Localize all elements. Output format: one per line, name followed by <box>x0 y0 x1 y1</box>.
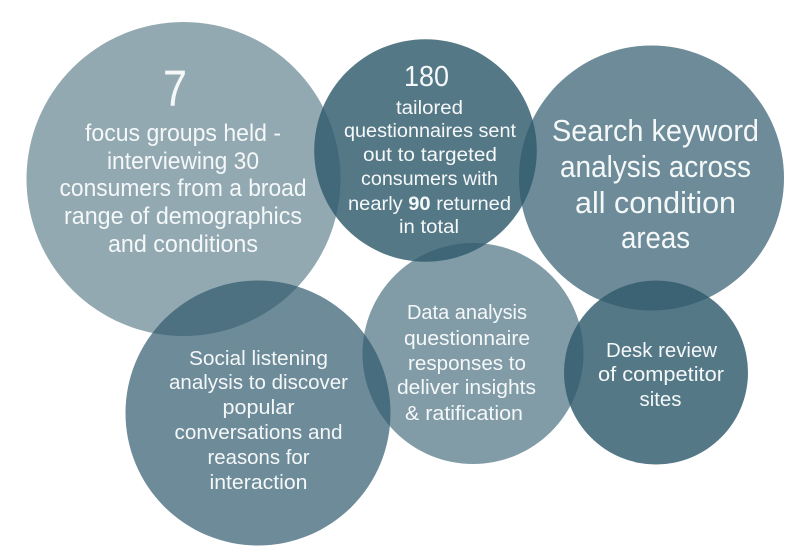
text: focus groups description: and conditions <box>108 231 258 258</box>
text: social listening description: analysis to discover <box>169 372 348 394</box>
text: desk review description <box>598 340 724 411</box>
panel: data analysis circle <box>362 243 584 464</box>
panel: social listening circle <box>126 280 390 546</box>
text: questionnaires description: in total <box>399 217 459 238</box>
text: desk review description: of competitor <box>598 364 724 386</box>
panel: questionnaires circle <box>314 39 537 262</box>
text: focus groups description: range of demographics <box>64 203 302 230</box>
text: social listening description: interaction <box>210 472 308 494</box>
text: data analysis description: & ratification <box>405 403 523 425</box>
number: 7 focus groups: 7 <box>163 60 187 117</box>
text: search keyword description <box>552 113 759 255</box>
text: questionnaires description: questionnaires sent <box>344 121 517 142</box>
panel: desk review circle <box>564 280 748 464</box>
text: social listening description: popular <box>222 397 295 419</box>
text: focus groups description: consumers from a broad <box>60 175 306 202</box>
text: search keyword description: analysis across <box>560 149 751 184</box>
text: focus groups description: interviewing 30 <box>107 148 259 175</box>
panel: focus groups circle <box>26 22 340 336</box>
text: social listening description: Social listening <box>189 348 328 370</box>
text: questionnaires description: 180 <box>404 61 449 93</box>
text: search keyword description: areas <box>621 220 690 255</box>
text: data analysis description: responses to <box>408 353 526 375</box>
text: social listening description: reasons for <box>208 447 310 469</box>
panel: search keyword circle <box>519 46 784 310</box>
text: focus groups description: focus groups held - <box>85 120 281 147</box>
text: questionnaires description: tailored <box>396 98 463 119</box>
text: search keyword description: Search keyword <box>552 113 759 148</box>
text: questionnaires description: consumers with <box>361 169 498 190</box>
text: desk review description: Desk review <box>606 340 718 362</box>
text: desk review description: sites <box>640 389 682 411</box>
text: data analysis description: Data analysis <box>407 302 527 324</box>
text: data analysis description: questionnaire <box>404 328 530 350</box>
text: data analysis description <box>397 302 536 425</box>
text: focus groups description <box>60 120 306 258</box>
text: social listening description <box>169 348 348 494</box>
text: search keyword description: all condition <box>575 185 736 220</box>
text: questionnaires description: nearly 90 returned <box>348 194 511 215</box>
text: questionnaires description: out to targeted <box>363 145 497 166</box>
text: social listening description: conversations and <box>174 422 342 444</box>
text: data analysis description: deliver insights <box>397 377 536 399</box>
text: questionnaires description <box>344 61 517 238</box>
